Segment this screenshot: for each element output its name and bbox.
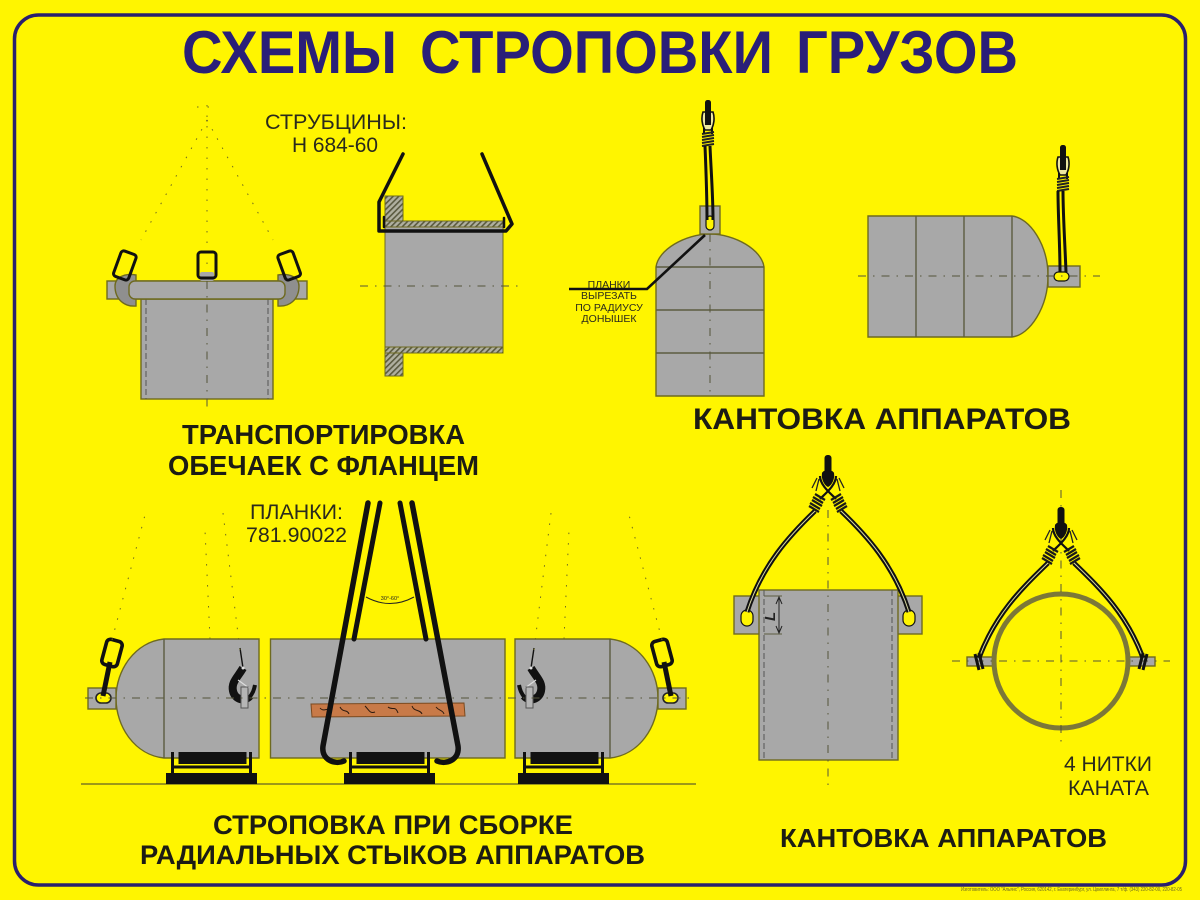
- heading: vessel tilting: КАНТОВКА АППАРАТОВ: [780, 823, 1107, 853]
- diagram: shell on trunnions, end view: [107, 105, 307, 408]
- label: clamps: Н 684-60: [292, 133, 378, 157]
- diagram: shell with two slings: L: [762, 612, 779, 621]
- panel: vessel tilting, top: [569, 100, 1100, 436]
- diagram: middle shell with slings: [85, 503, 695, 762]
- heading: shell transport: ТРАНСПОРТИРОВКА: [182, 419, 465, 450]
- diagram: horizontal vessel: [858, 145, 1100, 337]
- diagram: left end vessel: [88, 505, 259, 758]
- callout: strips note: [569, 235, 705, 325]
- diagram: shell with clamps, side section: [360, 154, 520, 376]
- callout: strips note: ПО РАДИУСУ: [575, 302, 643, 314]
- annotation: sling angle: [366, 596, 414, 604]
- panel: radial joint assembly: [81, 501, 696, 870]
- heading: radial joints: [140, 810, 645, 870]
- heading: shell transport: ОБЕЧАЕК С ФЛАНЦЕМ: [168, 450, 479, 481]
- label: clamps: СТРУБЦИНЫ:: [265, 110, 407, 134]
- title: СХЕМЫ СТРОПОВКИ ГРУЗОВ: [182, 19, 1018, 86]
- panel: vessel tilting, bottom: [734, 455, 1170, 853]
- annotation: sling angle: 30°-60°: [381, 596, 399, 602]
- label: strips: 781.90022: [246, 524, 347, 547]
- callout: strips note: ПЛАНКИ: [588, 279, 630, 291]
- supports: [166, 752, 609, 784]
- label: clamps: [265, 110, 407, 157]
- label: strips: [246, 501, 347, 547]
- diagram: vertical vessel: [656, 100, 764, 396]
- diagram: shell with two slings: [734, 455, 922, 785]
- label: four rope strands: КАНАТА: [1068, 777, 1149, 800]
- heading: vessel tilting: КАНТОВКА АППАРАТОВ: [693, 403, 1071, 436]
- label: four rope strands: [1064, 753, 1152, 800]
- ground line: [81, 783, 696, 785]
- diagram: right end vessel: [515, 505, 686, 758]
- label: strips: ПЛАНКИ:: [250, 501, 343, 524]
- heading: radial joints: РАДИАЛЬНЫХ СТЫКОВ АППАРАТОВ: [140, 840, 645, 870]
- callout: strips note: ВЫРЕЗАТЬ: [581, 290, 637, 302]
- heading: radial joints: СТРОПОВКА ПРИ СБОРКЕ: [213, 810, 573, 840]
- heading: shell transport: [168, 419, 479, 481]
- label: four rope strands: 4 НИТКИ: [1064, 753, 1152, 776]
- panel: flanged shell transport: [107, 105, 520, 481]
- callout: strips note: ДОНЫШЕК: [582, 313, 637, 325]
- diagram: ring section with slings: [952, 490, 1170, 745]
